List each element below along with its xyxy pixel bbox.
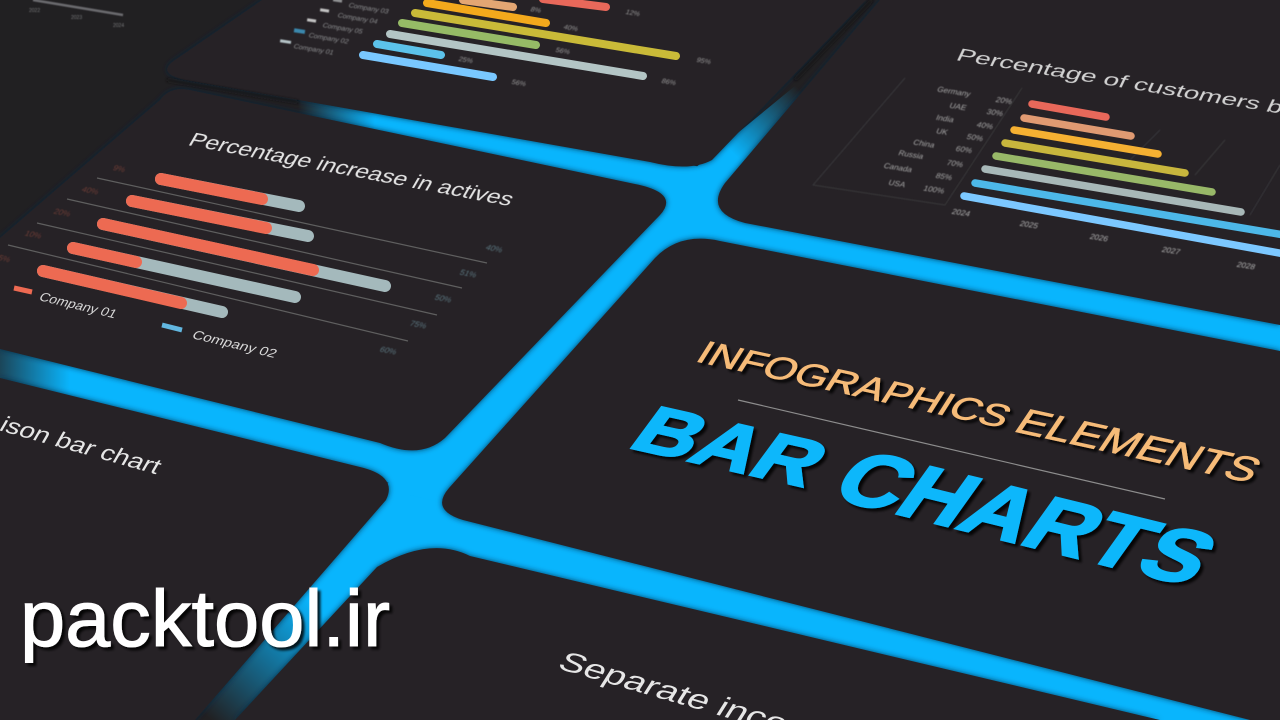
actives legend: company 01: Company 01 (36, 289, 120, 321)
customers chart country and percent labels: India (935, 113, 956, 124)
panel: percentage increase in actives (0, 89, 666, 450)
top chart values: 12% (624, 9, 641, 18)
subtitle: ELEMENTS (1007, 402, 1270, 490)
customers chart country and percent labels: 70% (945, 158, 965, 169)
panel: top stacked-colour bar chart (167, 0, 866, 167)
actives chart grid lines (8, 178, 487, 341)
customers chart country and percent labels: 100% (922, 184, 946, 195)
customers chart country and percent labels: Canada (882, 161, 914, 174)
customers chart country and percent labels: 50% (965, 132, 985, 143)
actives chart bars: company 01 (43, 179, 313, 303)
actives chart right values (378, 243, 504, 356)
customers chart year axis: 2028 (1235, 260, 1257, 271)
actives chart right values: 40% (484, 243, 504, 254)
panel: comparison bar chart (0, 378, 389, 720)
actives chart title: Percentage increase in actives (184, 130, 518, 211)
panel: separate income (235, 548, 1160, 720)
separate income title: Separate inco (553, 646, 795, 720)
customers chart country and percent labels: 85% (934, 171, 954, 182)
customers chart year axis: 2027 (1160, 245, 1182, 256)
top chart values: 40% (562, 24, 579, 33)
actives chart left values: 20% (52, 207, 72, 218)
customers chart title: Percentage of customers b (953, 44, 1280, 117)
subtitle (690, 334, 1270, 490)
panel: upper-left: 2024 (113, 23, 124, 29)
customers chart year axis: 2026 (1088, 232, 1110, 243)
actives chart right values: 50% (433, 293, 453, 304)
customers chart country and percent labels: Russia (897, 149, 926, 161)
panel: upper-left: 2022 (29, 8, 40, 14)
customers chart country and percent labels: China (912, 138, 937, 150)
top chart legend: Company 01 (292, 43, 335, 57)
customers chart country and percent labels: 30% (985, 107, 1005, 118)
top chart legend (280, 0, 390, 57)
dark gap lines between distant panels (167, 0, 872, 102)
subtitle: INFOGRAPHICS (690, 334, 1019, 434)
actives legend: company 01 (14, 288, 120, 321)
panel: upper-left (29, 0, 124, 29)
top chart legend: Company 02 (307, 32, 350, 46)
top chart values: 86% (660, 78, 677, 87)
actives legend: company 02 (162, 325, 280, 361)
actives chart right values: 75% (408, 319, 428, 330)
customers chart year axis: 2024 (950, 207, 972, 218)
customers chart bars (964, 104, 1280, 255)
main title: BAR (616, 393, 844, 500)
customers chart grid (813, 78, 1280, 215)
top chart values (457, 7, 712, 88)
actives chart left values (0, 164, 127, 264)
actives chart bars: company 02 (43, 179, 385, 312)
top chart values: 8% (529, 7, 542, 15)
actives chart left values: 10% (23, 229, 43, 240)
top chart values: 56% (554, 47, 571, 56)
customers chart country and percent labels (882, 85, 1014, 195)
actives chart left values: 40% (80, 185, 100, 196)
actives chart left values: 9% (111, 164, 127, 174)
customers chart year axis (950, 207, 1257, 271)
customers chart country and percent labels: 20% (994, 95, 1014, 106)
actives chart right values: 60% (378, 345, 398, 356)
customers chart year axis: 2025 (1018, 219, 1040, 230)
customers chart country and percent labels: 60% (954, 144, 974, 155)
top chart values: 95% (695, 57, 712, 66)
customers chart country and percent labels: 40% (975, 120, 995, 131)
customers chart country and percent labels: Germany (936, 85, 972, 98)
top chart legend: Company 05 (321, 22, 364, 36)
actives legend: company 02: Company 02 (189, 327, 280, 361)
panel: title card (442, 239, 1280, 720)
top chart values: 56% (510, 79, 527, 88)
top chart bars (363, 0, 676, 77)
top chart legend: Company 03 (347, 2, 390, 16)
customers chart country and percent labels: USA (887, 178, 908, 189)
watermark: packtool.ir (20, 574, 390, 663)
customers chart country and percent labels: UK (935, 127, 950, 137)
divider (738, 400, 1165, 499)
top chart legend: Company 04 (336, 12, 379, 26)
main title: CHARTS (817, 435, 1234, 601)
top chart values: 25% (457, 56, 474, 65)
actives chart right values: 51% (458, 268, 478, 279)
main title (616, 393, 1234, 601)
panel: percentage of customers (718, 0, 1280, 325)
panel: upper-left: 2023 (71, 15, 82, 21)
customers chart country and percent labels: UAE (948, 101, 968, 112)
